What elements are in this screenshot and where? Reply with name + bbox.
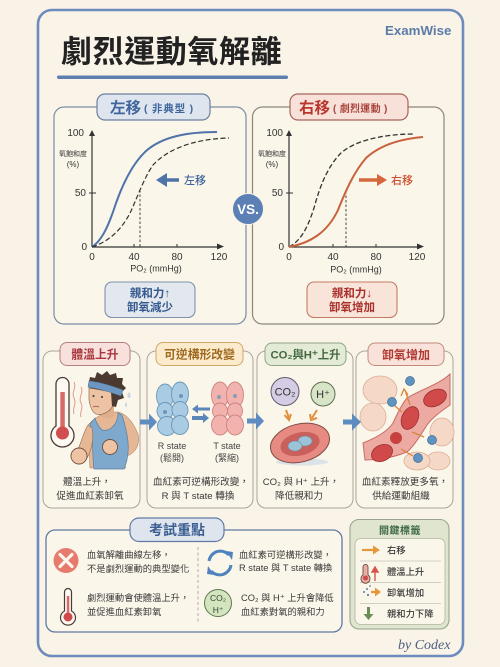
chart: right shift curve: 50 <box>272 188 283 199</box>
text: point 1 <box>87 549 189 574</box>
text block: 降低親和力 <box>275 490 323 502</box>
chart: left shift curve: 氧飽和度 <box>59 149 87 158</box>
heading: 關鍵標籤 <box>379 524 421 537</box>
chart: left shift curve: 80 <box>171 252 183 263</box>
icon: H+: H⁺ <box>316 389 330 401</box>
chart: right shift curve: 0 <box>286 252 292 263</box>
icon: H+ <box>311 382 335 406</box>
label: R state: (鬆開) <box>160 452 184 463</box>
chart: right shift curve <box>258 128 426 274</box>
brand: ExamWise: ExamWise <box>385 23 451 38</box>
icon: red blood cell <box>266 417 334 469</box>
text block <box>263 477 339 502</box>
callout: affinity up: 親和力↑ <box>130 286 170 300</box>
text: point 2: 並促進血紅素卸氧 <box>87 606 161 617</box>
panel: exam key points <box>46 518 342 632</box>
chart: right shift curve: 80 <box>370 252 382 263</box>
heading: right shift <box>290 94 408 120</box>
heading: left shift <box>97 94 210 120</box>
arrow: step 1 to 2 <box>140 414 157 430</box>
heading <box>368 343 444 366</box>
chart: left shift curve: 0 <box>89 252 95 263</box>
heading: left shift: 左移 <box>110 99 142 117</box>
chart: left shift curve: (%) <box>67 160 80 169</box>
legend row: right shift: 右移 <box>387 544 406 556</box>
chart: left shift curve: 左移 <box>184 173 206 187</box>
text block: 供給運動組織 <box>372 490 430 502</box>
heading: left shift: ( 非典型 ) <box>144 102 194 115</box>
heading: right shift: 右移 <box>299 99 331 117</box>
heading <box>60 342 130 366</box>
icon: CO2: CO₂ <box>275 386 295 398</box>
text block: 血紅素釋放更多氧， <box>362 476 448 488</box>
icon: CO2 <box>271 378 299 406</box>
panel: right shift <box>252 94 444 324</box>
text block <box>362 476 448 502</box>
label: T state: (緊縮) <box>215 452 239 463</box>
icon: CO2 and H+ <box>204 590 232 616</box>
chart: right shift curve: 120 <box>409 252 426 263</box>
icon: thermometer <box>51 378 82 447</box>
label: T state: T state <box>213 441 241 451</box>
chart: right shift curve: 100 <box>266 128 283 139</box>
text block: CO₂ 與 H⁺ 上升， <box>263 477 339 488</box>
text block: 血紅素可逆構形改變， <box>153 476 249 488</box>
icon: cross <box>54 548 78 573</box>
icon: thermometer <box>61 589 76 625</box>
chart: left shift curve: 120 <box>211 252 228 263</box>
panel: key labels legend <box>350 520 449 629</box>
text: point 4: CO₂ 與 H⁺ 上升會降低 <box>241 592 334 603</box>
chart: left shift curve: 40 <box>128 252 140 263</box>
heading: 體溫上升 <box>71 348 119 362</box>
callout: affinity down <box>307 282 397 318</box>
chart: right shift curve: 氧飽和度 <box>258 149 286 158</box>
chart: left shift curve: 0 <box>81 242 87 253</box>
text block: R 與 T state 轉換 <box>162 490 235 502</box>
heading: 可逆構形改變 <box>164 348 235 362</box>
chart: left shift curve <box>59 128 229 274</box>
text: point 3: R state 與 T state 轉換 <box>239 562 332 573</box>
title: 劇烈運動氧解離 <box>61 34 282 70</box>
panel: reversible conformational change <box>147 342 253 508</box>
title underline <box>57 76 288 79</box>
panel: body temperature rise <box>43 342 140 508</box>
icon: reversible arrows <box>192 404 210 423</box>
text: point 2: 劇烈運動會使體溫上升， <box>87 592 189 603</box>
icon: CO2 and H+: CO₂ <box>210 593 226 603</box>
arrow: right <box>359 178 378 182</box>
panel: left shift <box>54 94 246 324</box>
heading <box>156 342 243 366</box>
panel: CO2 and H+ rise <box>257 343 353 508</box>
illustration: blood vessel and tissue <box>360 374 454 470</box>
chart: right shift curve: 40 <box>327 252 339 263</box>
heading: CO₂與H⁺上升 <box>271 348 340 362</box>
text: point 4 <box>241 592 334 617</box>
text: point 1: 不是劇烈運動的典型變化 <box>87 563 189 574</box>
callout: affinity down: 親和力↓ <box>332 286 372 300</box>
text: point 1: 血氧解離曲線左移， <box>87 549 171 560</box>
chart: right shift curve: PO₂ (mmHg) <box>330 264 382 274</box>
heading <box>265 343 346 366</box>
label: T state <box>213 441 241 463</box>
text: point 3: 血紅素可逆構形改變， <box>239 549 332 560</box>
icon: T state hemoglobin <box>212 382 244 435</box>
callout: affinity up <box>105 282 195 318</box>
arrow: left <box>167 178 179 182</box>
label: R state <box>158 441 186 463</box>
text block <box>56 476 124 502</box>
legend row: affinity decrease: 親和力下降 <box>387 608 434 619</box>
label: R state: R state <box>158 441 186 451</box>
heading <box>130 518 224 542</box>
signature: by Codex <box>398 638 451 653</box>
chart: right shift curve: 右移 <box>391 173 413 187</box>
icon: CO2 and H+: H⁺ <box>213 605 224 615</box>
text block: 促進血紅素卸氧 <box>56 490 124 502</box>
text: point 3 <box>239 549 332 573</box>
chart: right shift curve: 0 <box>278 242 284 253</box>
legend row: temperature rise: 體溫上升 <box>387 566 424 577</box>
arrow: step 3 to 4 <box>343 414 361 430</box>
heading: 考試重點 <box>149 522 205 538</box>
chart: left shift curve: 100 <box>67 128 84 139</box>
chart: left shift curve: 50 <box>75 188 86 199</box>
text: point 2 <box>87 592 189 617</box>
text block <box>153 476 249 502</box>
heading: 卸氧增加 <box>382 347 430 362</box>
panel: oxygen unloading increase <box>356 343 454 508</box>
vs badge: VS. <box>237 202 259 217</box>
icon: cycle arrows <box>207 551 233 575</box>
icon: R state hemoglobin <box>156 382 188 436</box>
icon: orange arrows <box>284 410 317 420</box>
text: point 4: 血紅素對氧的親和力 <box>241 606 325 617</box>
vs badge <box>232 194 264 224</box>
chart: left shift curve: PO₂ (mmHg) <box>130 264 182 274</box>
arrow: step 2 to 3 <box>247 412 264 430</box>
callout: affinity down: 卸氧增加 <box>329 300 375 314</box>
illustration: runner <box>71 371 139 469</box>
chart: right shift curve: (%) <box>266 160 279 169</box>
callout: affinity up: 卸氧減少 <box>127 300 173 314</box>
text block: 體溫上升， <box>63 476 111 488</box>
heading: right shift: ( 劇烈運動 ) <box>333 102 388 115</box>
legend row: oxygen unloading: 卸氧增加 <box>387 587 424 598</box>
